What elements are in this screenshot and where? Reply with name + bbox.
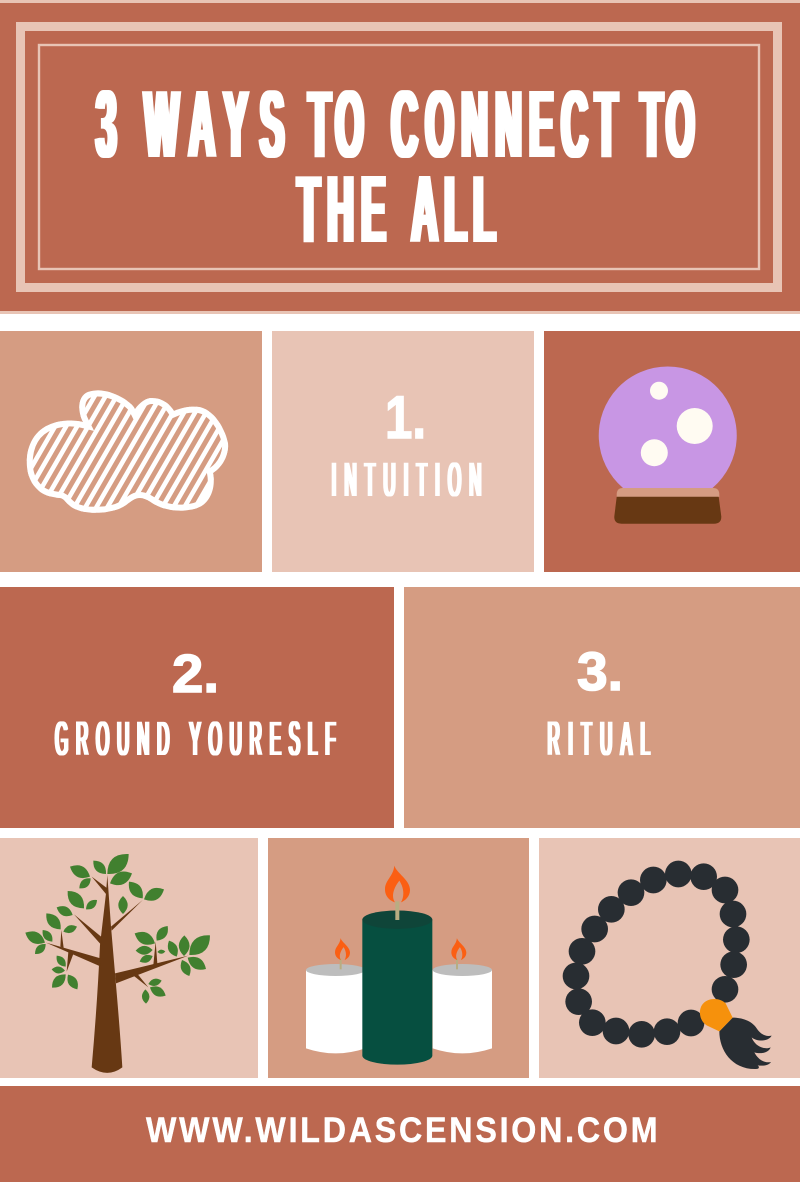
right white candle — [433, 938, 492, 1053]
icon: candles — [306, 866, 492, 1065]
icon: tree — [23, 848, 215, 1073]
green pillar candle — [362, 866, 432, 1065]
label: intuition: INTUITION — [332, 452, 481, 507]
panel: crystal ball — [544, 331, 800, 572]
left white candle — [306, 938, 365, 1053]
tassel — [719, 1018, 772, 1069]
title: CONNECT — [391, 71, 617, 178]
header banner — [0, 0, 800, 314]
label: ritual: RITUAL — [548, 711, 650, 766]
tree leaves — [23, 848, 215, 1004]
number 2: 2. — [172, 644, 219, 704]
title: TO — [309, 71, 364, 178]
title: 3 — [96, 71, 116, 178]
icon: hatched cloud — [26, 390, 228, 513]
title: WAYS — [144, 71, 284, 178]
title — [96, 71, 709, 263]
title: THE — [298, 156, 386, 263]
panel: cloud — [0, 331, 266, 572]
panel: ground yourself — [0, 587, 394, 828]
website url: WWW.WILDASCENSION.COM — [146, 1112, 658, 1150]
footer banner — [0, 1086, 800, 1182]
inner title frame — [39, 45, 759, 269]
title: TO — [640, 71, 694, 178]
beads — [563, 861, 750, 1048]
panel: intuition — [272, 331, 534, 572]
panel: tree — [0, 838, 258, 1078]
orange knot — [700, 999, 733, 1031]
number 3: 3. — [577, 642, 623, 702]
panel: ritual — [404, 587, 800, 828]
title: ALL — [412, 156, 496, 263]
icon: crystal ball — [599, 366, 737, 524]
icon: prayer beads — [563, 861, 772, 1069]
panel: prayer beads — [539, 838, 800, 1078]
outer title frame — [20, 26, 778, 288]
number 1: 1. — [385, 384, 426, 451]
tree trunk and branches — [46, 875, 188, 1073]
label: ground yourself: GROUND YOURESLF — [55, 711, 335, 766]
panel: candles — [268, 838, 529, 1078]
